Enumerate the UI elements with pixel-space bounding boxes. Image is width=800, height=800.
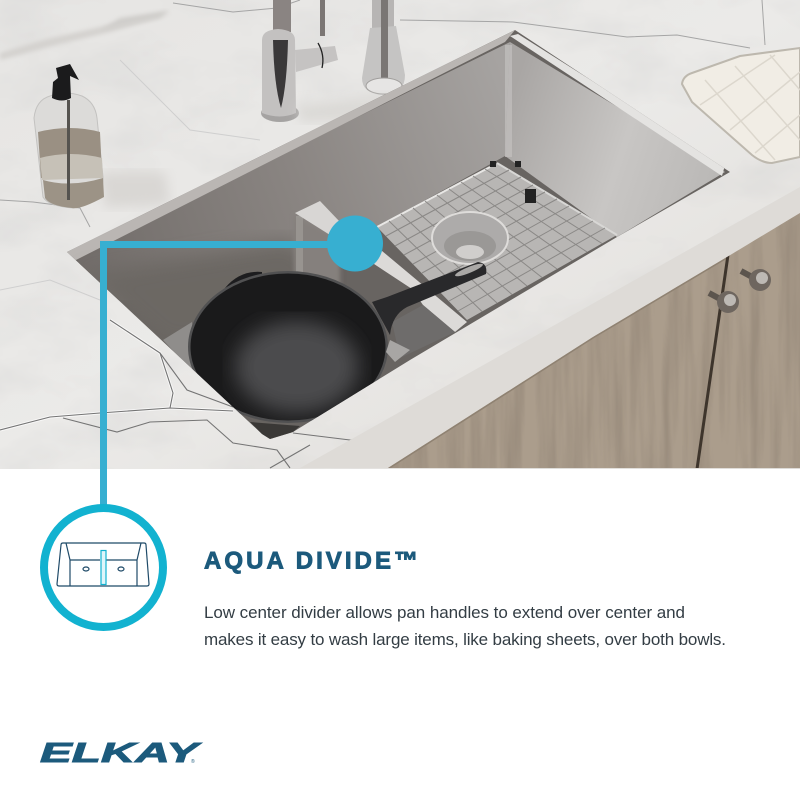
icon: door knob left — [709, 291, 739, 313]
heading: AQUA DIVIDE™ — [204, 548, 418, 574]
faucet — [261, 0, 338, 122]
center divider top strip — [295, 201, 340, 235]
marble countertop — [0, 0, 800, 469]
soap dispenser — [362, 0, 405, 95]
soap bottle — [34, 64, 170, 208]
strainer basket — [432, 212, 508, 264]
body text: makes it easy to wash large items, like baking sheets, over both bowls. — [204, 630, 726, 649]
rack clips — [490, 161, 536, 203]
body text — [204, 603, 726, 649]
sink basin — [60, 30, 730, 439]
pot holder — [682, 48, 800, 163]
cabinet doors — [380, 205, 800, 469]
callout marker dot — [327, 216, 383, 272]
left rack under pan — [163, 322, 196, 375]
icon: sink in teal ring — [44, 508, 163, 627]
logo: Elkay: ® — [191, 758, 195, 765]
logo: Elkay — [40, 737, 202, 768]
right rack piece beside pan — [386, 340, 410, 362]
logo: Elkay: ELKAY — [40, 737, 202, 768]
pan handle — [372, 262, 486, 335]
sink grid rack — [377, 163, 617, 320]
dark sink corner — [250, 422, 300, 439]
right bowl sliver — [392, 305, 455, 358]
body text: Low center divider allows pan handles to extend over center and — [204, 603, 685, 622]
frying pan — [188, 262, 486, 423]
photo: kitchen sink on marble counter — [0, 0, 800, 469]
counter front edge — [300, 187, 800, 468]
right wall — [505, 42, 725, 237]
back wall — [75, 42, 510, 300]
pump — [52, 64, 79, 100]
callout connector line — [100, 241, 330, 506]
icon: door knob right — [741, 269, 771, 291]
divider vertical face — [293, 248, 341, 282]
shadow behind faucet — [297, 93, 400, 122]
